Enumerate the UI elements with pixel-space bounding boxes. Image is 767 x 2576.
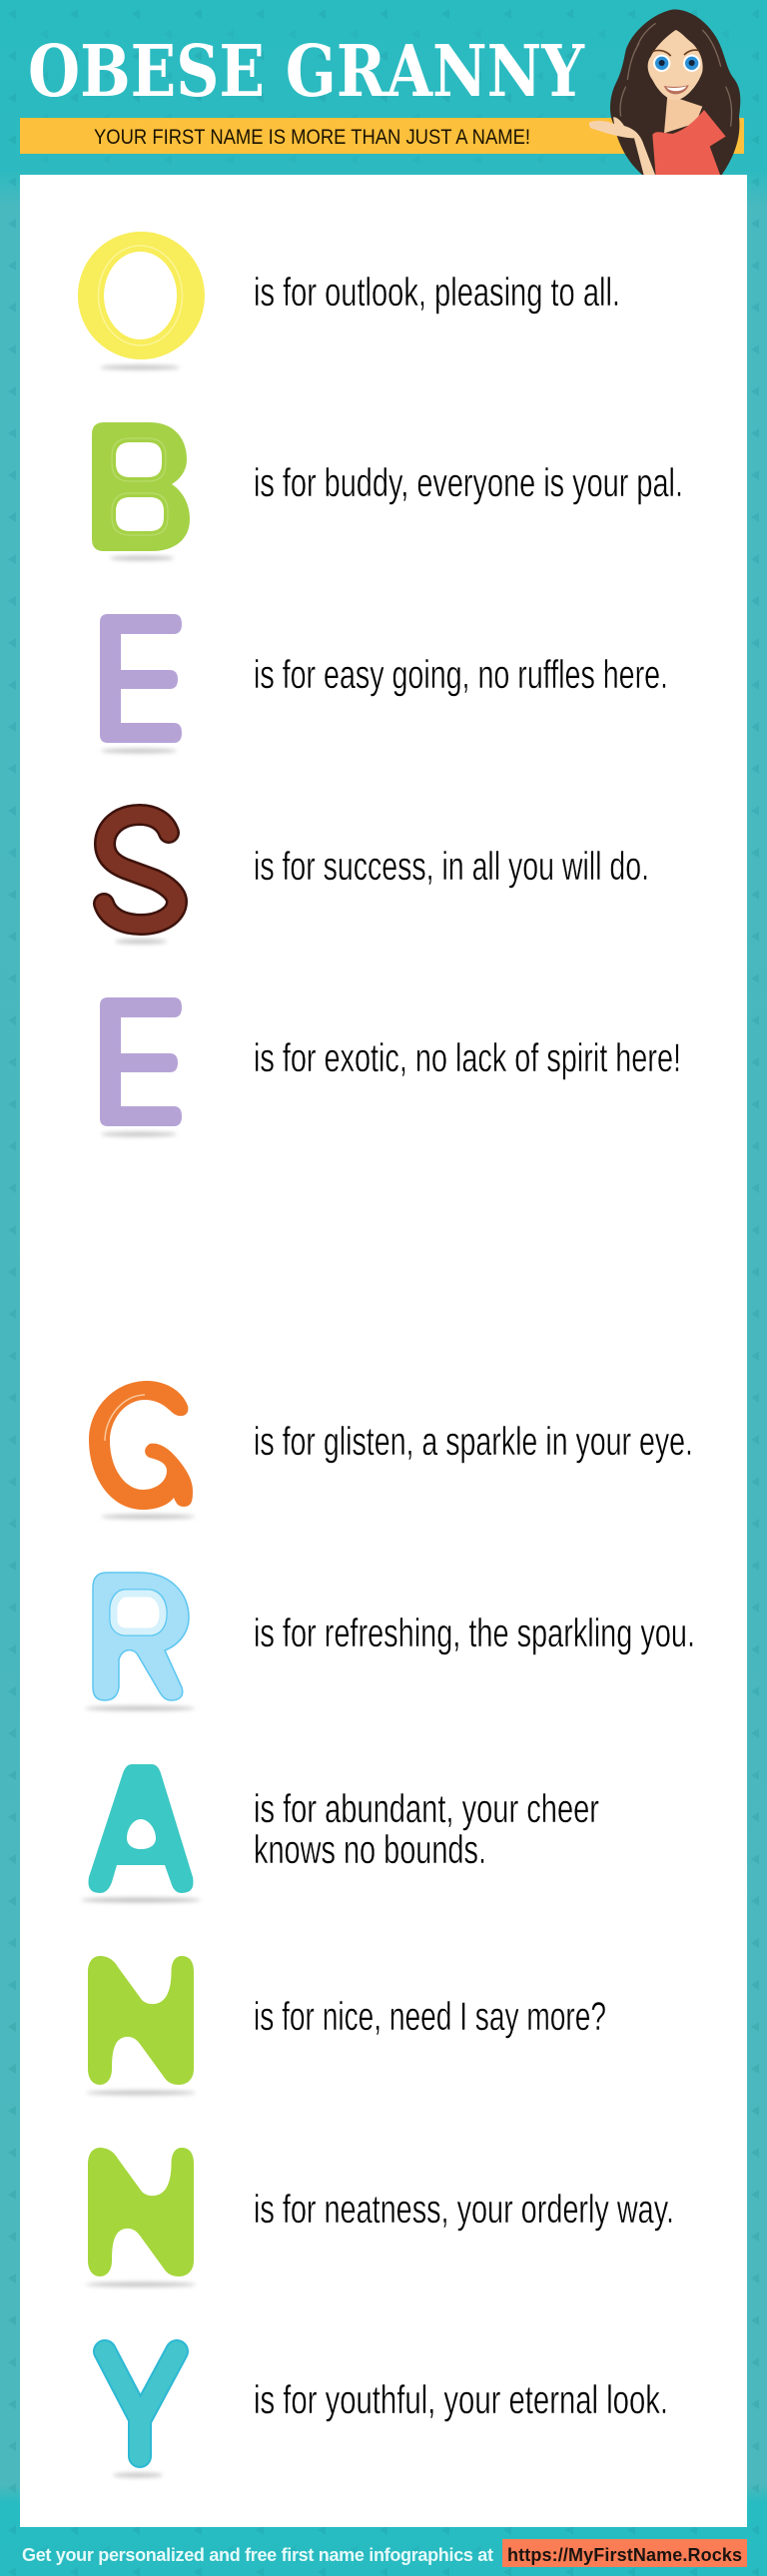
row: letter O bbox=[78, 232, 620, 369]
subtitle banner bbox=[20, 118, 744, 154]
row: letter Y bbox=[105, 2351, 668, 2478]
row: letter N bbox=[86, 1956, 606, 2095]
footer link badge: https://MyFirstName.Rocks bbox=[507, 2545, 742, 2565]
footer call to action: Get your personalized and free first name infographics at bbox=[22, 2545, 493, 2565]
icon: green letter B bbox=[92, 422, 190, 561]
footer link badge bbox=[502, 2539, 747, 2567]
icon: green letter N bbox=[86, 2148, 196, 2286]
text: abundant: knows no bounds. bbox=[254, 1828, 486, 1872]
row: letter E bbox=[100, 614, 668, 753]
icon: blue letter R bbox=[85, 1573, 195, 1711]
icon: cartoon woman presenter bbox=[589, 9, 740, 177]
row: letter S bbox=[104, 815, 649, 945]
row: letter A bbox=[81, 1764, 599, 1903]
icon: teal letter A bbox=[81, 1764, 201, 1903]
title: OBESE GRANNY bbox=[28, 29, 585, 113]
icon: purple letter E bbox=[100, 614, 182, 753]
icon: purple letter E bbox=[100, 997, 182, 1136]
row: letter R bbox=[85, 1573, 695, 1711]
row: second letter N bbox=[86, 2148, 674, 2286]
icon: yellow letter O bbox=[78, 232, 205, 369]
icon: orange letter G bbox=[89, 1381, 195, 1520]
text: abundant bbox=[254, 1787, 599, 1872]
text: abundant: is for abundant, your cheer bbox=[254, 1787, 599, 1831]
icon: green letter N bbox=[86, 1956, 196, 2095]
text: outlook: is for outlook, pleasing to all. bbox=[254, 271, 620, 315]
subtitle banner: YOUR FIRST NAME IS MORE THAN JUST A NAME! bbox=[94, 126, 530, 149]
icon: blue-teal letter Y bbox=[105, 2351, 177, 2478]
row: letter G bbox=[89, 1381, 693, 1520]
row: letter B bbox=[92, 422, 683, 561]
icon: brown letter S bbox=[104, 815, 177, 945]
row: second letter E bbox=[100, 997, 681, 1136]
footer call to action bbox=[22, 2539, 747, 2567]
text: nice: is for nice, need I say more? bbox=[254, 1995, 606, 2039]
